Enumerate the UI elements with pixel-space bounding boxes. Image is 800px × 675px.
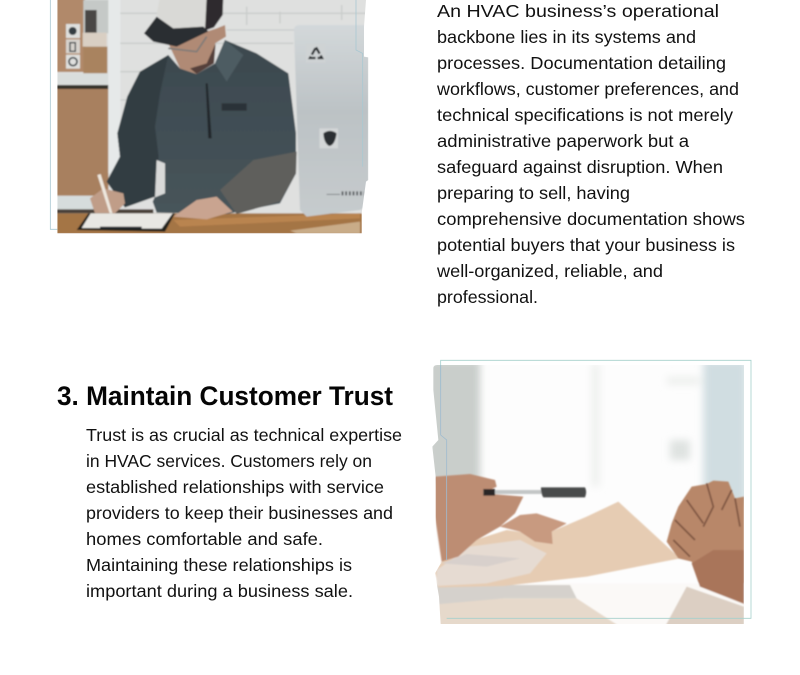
body text: customer trust: important during a business sale. [86,581,353,601]
hands and pen [90,188,125,217]
body text: customer trust: established relationships with service [86,477,384,497]
body text: operational backbone: technical specifications is not merely [437,105,733,125]
cap [158,0,206,28]
photo: man writing on clipboard beside monitor [50,0,370,237]
body text: operational backbone: professional. [437,287,538,307]
body text: customer trust: Maintaining these relationships is [86,555,352,575]
face [168,25,226,74]
body text: customer trust: providers to keep their businesses and [86,503,393,523]
body text: customer trust [86,425,402,601]
paper [435,502,680,587]
jacket [107,40,296,214]
body text: operational backbone: preparing to sell, having [437,183,630,203]
body text: customer trust: Trust is as crucial as technical expertise [86,425,402,445]
body text: customer trust: homes comfortable and safe. [86,529,323,549]
body text: customer trust: in HVAC services. Customers rely on [86,451,372,471]
body text: operational backbone: processes. Documentation detailing [437,53,726,73]
photo frame line [441,360,751,618]
photo frame line [50,0,363,229]
clasped hands [667,481,744,604]
body text: operational backbone: workflows, customer preferences, and [436,79,739,99]
hand with pen [500,513,567,544]
body text: operational backbone: administrative paperwork but a [437,131,689,151]
body text: operational backbone [436,1,745,307]
monitor [294,25,368,217]
body text: operational backbone: safeguard against disruption. When [437,157,723,177]
body text: operational backbone: backbone lies in its systems and [437,27,696,47]
body text: operational backbone: well-organized, reliable, and [436,261,663,281]
table [698,582,744,604]
heading: 3. Maintain Customer Trust: 3. Maintain Customer Trust [57,381,393,411]
body text: operational backbone: An HVAC business’s operational [437,1,719,21]
body text: operational backbone: potential buyers that your business is [437,235,735,255]
clipboard [77,213,175,232]
photo: handing over document and pen [427,360,751,627]
body text: operational backbone: comprehensive documentation shows [437,209,745,229]
